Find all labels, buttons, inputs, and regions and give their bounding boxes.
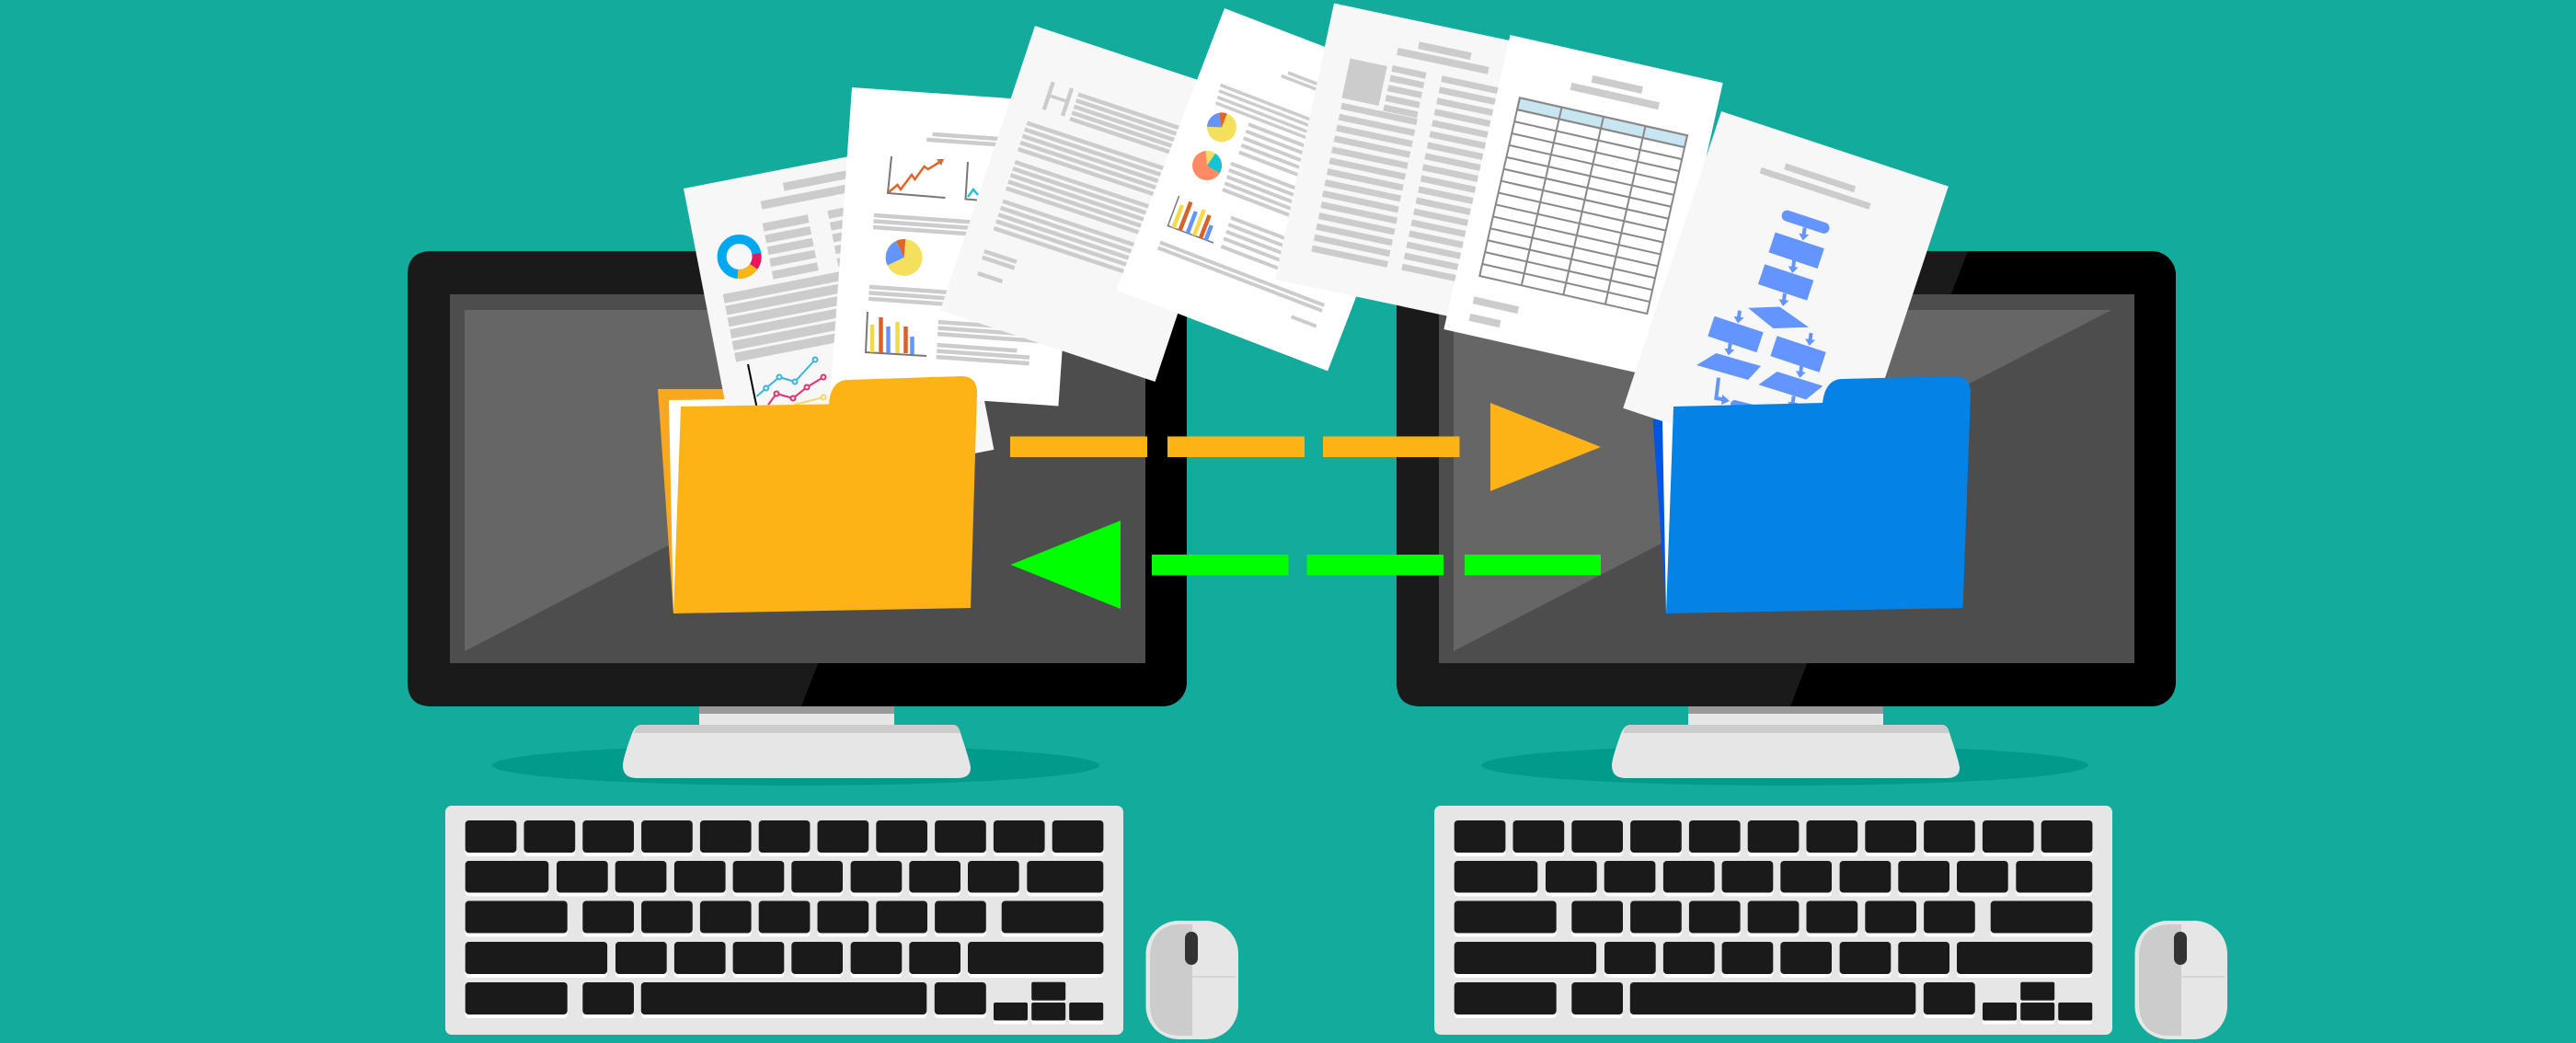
document: pie chart report <box>1116 8 1436 371</box>
table <box>1479 97 1687 314</box>
bar chart: tilted <box>1167 196 1213 243</box>
flow chart shapes <box>1696 307 1823 410</box>
heading letter: H <box>1036 72 1080 126</box>
image placeholder <box>1341 58 1387 106</box>
right monitor <box>1397 251 2176 778</box>
flow chart arrows <box>1723 227 1816 409</box>
line chart <box>748 357 826 409</box>
left monitor <box>408 251 1187 778</box>
orange folder back <box>658 389 736 613</box>
right mouse <box>2134 921 2227 1039</box>
left desk shadow <box>492 745 1099 785</box>
pie chart: yellow <box>1207 112 1236 142</box>
right desk shadow <box>1481 745 2088 785</box>
arrow: orange dashed to the right <box>1010 403 1601 491</box>
blue folder front <box>1666 376 1971 613</box>
document: donut chart report <box>684 140 994 499</box>
line chart: orange trend <box>888 156 946 198</box>
blue folder back <box>1652 419 1684 613</box>
pie chart: salmon <box>1192 151 1222 180</box>
left keyboard <box>445 806 1123 1035</box>
right keyboard <box>1434 806 2112 1035</box>
line chart: teal <box>966 162 978 201</box>
document: two column article <box>1275 4 1550 326</box>
left mouse <box>1146 921 1238 1039</box>
donut chart <box>722 239 757 274</box>
document: flow chart <box>1623 111 1949 483</box>
arrow: green dashed to the left <box>1010 521 1601 609</box>
pie chart <box>886 239 923 276</box>
bar chart <box>866 312 926 356</box>
document: charts report <box>831 87 1079 406</box>
orange folder front <box>673 376 977 613</box>
document: data table <box>1443 35 1723 377</box>
document: heading text page <box>940 26 1249 382</box>
